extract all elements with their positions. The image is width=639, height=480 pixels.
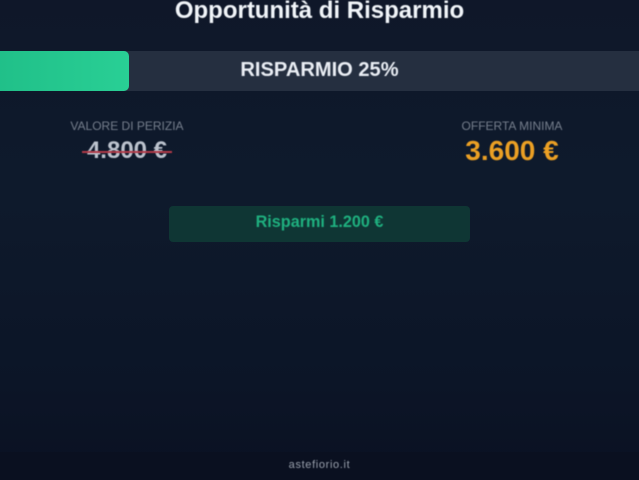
minimum offer block <box>462 119 563 166</box>
savings text: Risparmi 1.200 € <box>256 213 383 231</box>
bar fill: 25% <box>0 51 129 91</box>
savings callout <box>169 206 470 242</box>
footer <box>0 452 639 480</box>
minimum offer label: OFFERTA MINIMA <box>462 119 562 133</box>
savings progress bar <box>0 51 639 91</box>
appraisal amount: 4.800 € <box>87 137 167 164</box>
appraisal value block <box>70 119 184 164</box>
strikethrough line <box>82 151 172 152</box>
bar label: RISPARMIO 25% <box>240 59 399 81</box>
minimum offer amount: 3.600 € <box>465 135 559 166</box>
appraisal label: VALORE DI PERIZIA <box>70 119 184 133</box>
footer site name: astefiorio.it <box>289 459 350 471</box>
